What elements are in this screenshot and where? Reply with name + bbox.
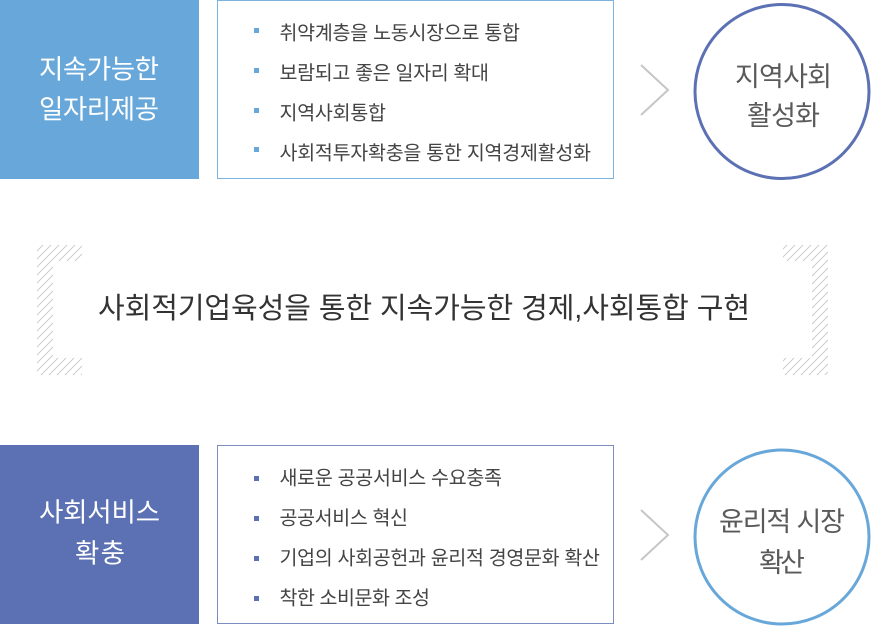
panel: central statement — [37, 245, 828, 375]
list panel: top — [218, 0, 614, 178]
heading box: 사회서비스 확충 — [0, 445, 199, 624]
list panel: top: 사회적투자확충을 통한 지역경제활성화 — [280, 142, 591, 164]
heading box: 지속가능한 일자리제공 — [0, 0, 199, 179]
list panel: bottom: 공공서비스 혁신 — [280, 508, 408, 530]
list panel: top: 취약계층을 노동시장으로 통합 — [280, 22, 520, 44]
circle: 윤리적 시장 확산: 윤리적 시장 — [719, 507, 845, 537]
heading box: 사회서비스 확충: 확충 — [75, 538, 125, 568]
arrow: top chevron — [641, 65, 668, 115]
list panel: bottom: 새로운 공공서비스 수요충족 — [280, 468, 502, 490]
list panel: top: 보람되고 좋은 일자리 확대 — [280, 62, 489, 84]
heading box: 지속가능한 일자리제공: 일자리제공 — [39, 94, 159, 124]
panel: top row — [0, 0, 869, 179]
circle: 지역사회 활성화: 활성화 — [747, 101, 820, 131]
list panel: bottom: 착한 소비문화 조성 — [280, 588, 430, 610]
list panel: top: 지역사회통합 — [280, 102, 386, 124]
heading box: 지속가능한 일자리제공: 지속가능한 — [39, 54, 159, 84]
circle: 지역사회 활성화: 지역사회 — [735, 62, 832, 92]
bracket: left hatched — [37, 245, 82, 375]
arrow: bottom chevron — [641, 510, 668, 560]
heading box: 사회서비스 확충: 사회서비스 — [39, 498, 160, 528]
circle: 지역사회 활성화 — [695, 4, 869, 178]
bracket: right hatched — [783, 245, 828, 375]
list panel: bottom — [218, 446, 614, 624]
circle: 윤리적 시장 확산: 확산 — [759, 548, 805, 578]
circle: 윤리적 시장 확산 — [695, 450, 869, 624]
central text: 사회적기업육성을 통한 지속가능한 경제,사회통합 구현 — [98, 292, 750, 325]
list panel: bottom: 기업의 사회공헌과 윤리적 경영문화 확산 — [280, 548, 600, 570]
panel: bottom row — [0, 445, 869, 624]
